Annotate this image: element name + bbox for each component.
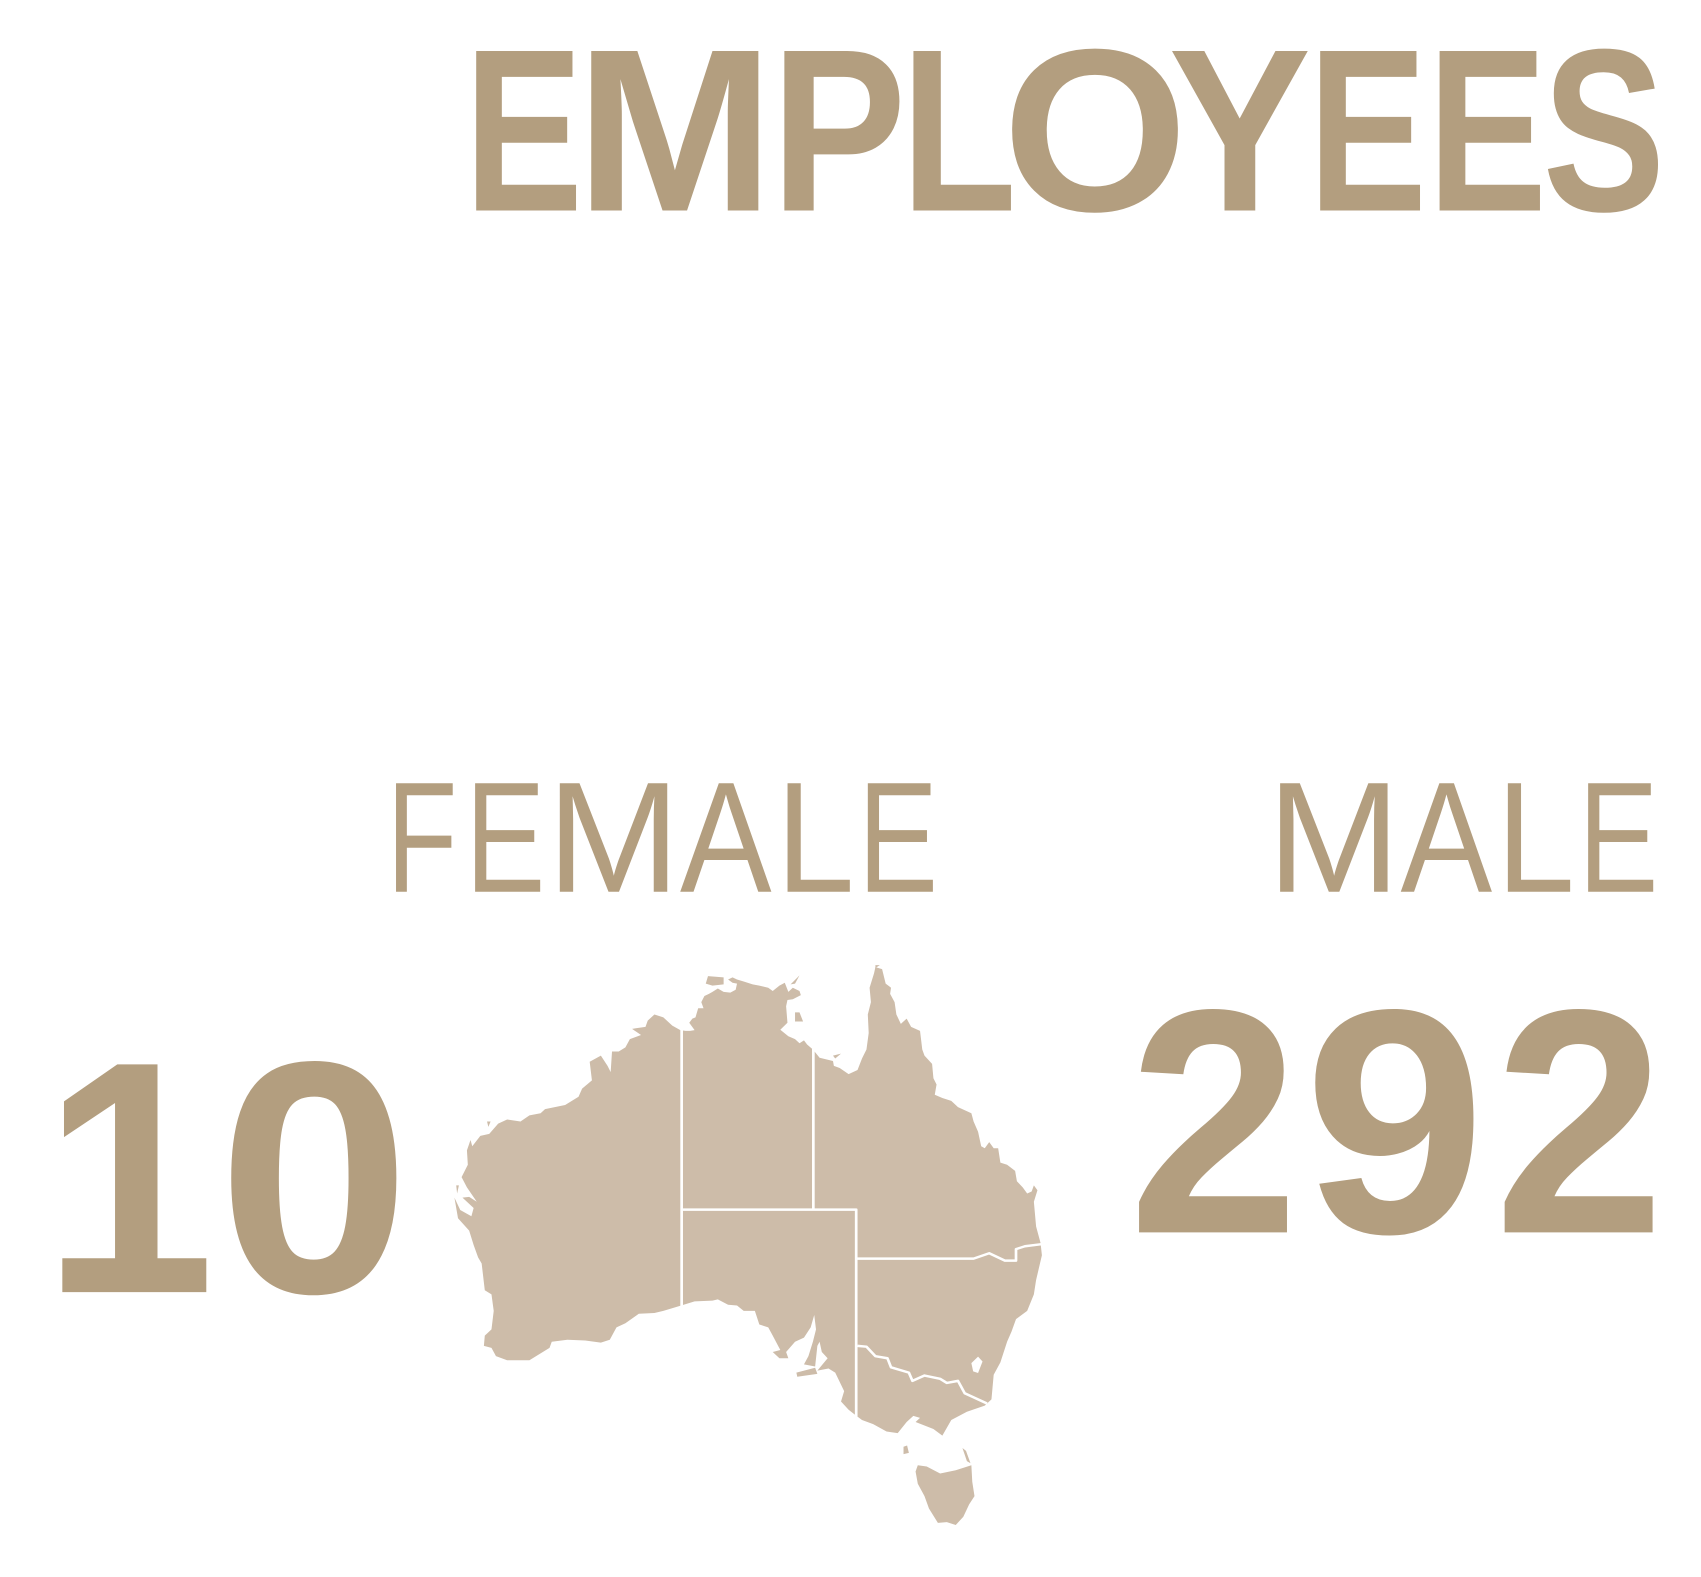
title: Y bbox=[1168, 2, 1311, 261]
title: P bbox=[771, 2, 906, 261]
number: female count: 0 bbox=[218, 993, 411, 1363]
title: S bbox=[1543, 2, 1665, 261]
title: L bbox=[901, 2, 1017, 261]
label: male: A bbox=[1401, 750, 1492, 926]
label: male: L bbox=[1496, 750, 1575, 926]
label: female: L bbox=[776, 750, 855, 926]
number: male count: 2 bbox=[1128, 942, 1299, 1300]
map: Australia bbox=[454, 965, 1042, 1525]
label: male: E bbox=[1578, 750, 1658, 926]
label: female: E bbox=[465, 750, 545, 926]
label: female: M bbox=[547, 750, 680, 926]
title: E bbox=[1308, 2, 1427, 261]
title: E bbox=[1428, 2, 1547, 261]
number: male count: 9 bbox=[1304, 942, 1486, 1300]
title: O bbox=[1002, 2, 1188, 261]
title: M bbox=[575, 2, 774, 261]
label: female: E bbox=[858, 750, 938, 926]
label: male: M bbox=[1267, 750, 1401, 926]
title: E bbox=[464, 2, 583, 261]
number: female count: 1 bbox=[43, 993, 215, 1363]
number: male count: 2 bbox=[1494, 942, 1665, 1300]
label: female: F bbox=[387, 750, 457, 926]
label: female: A bbox=[680, 750, 772, 926]
